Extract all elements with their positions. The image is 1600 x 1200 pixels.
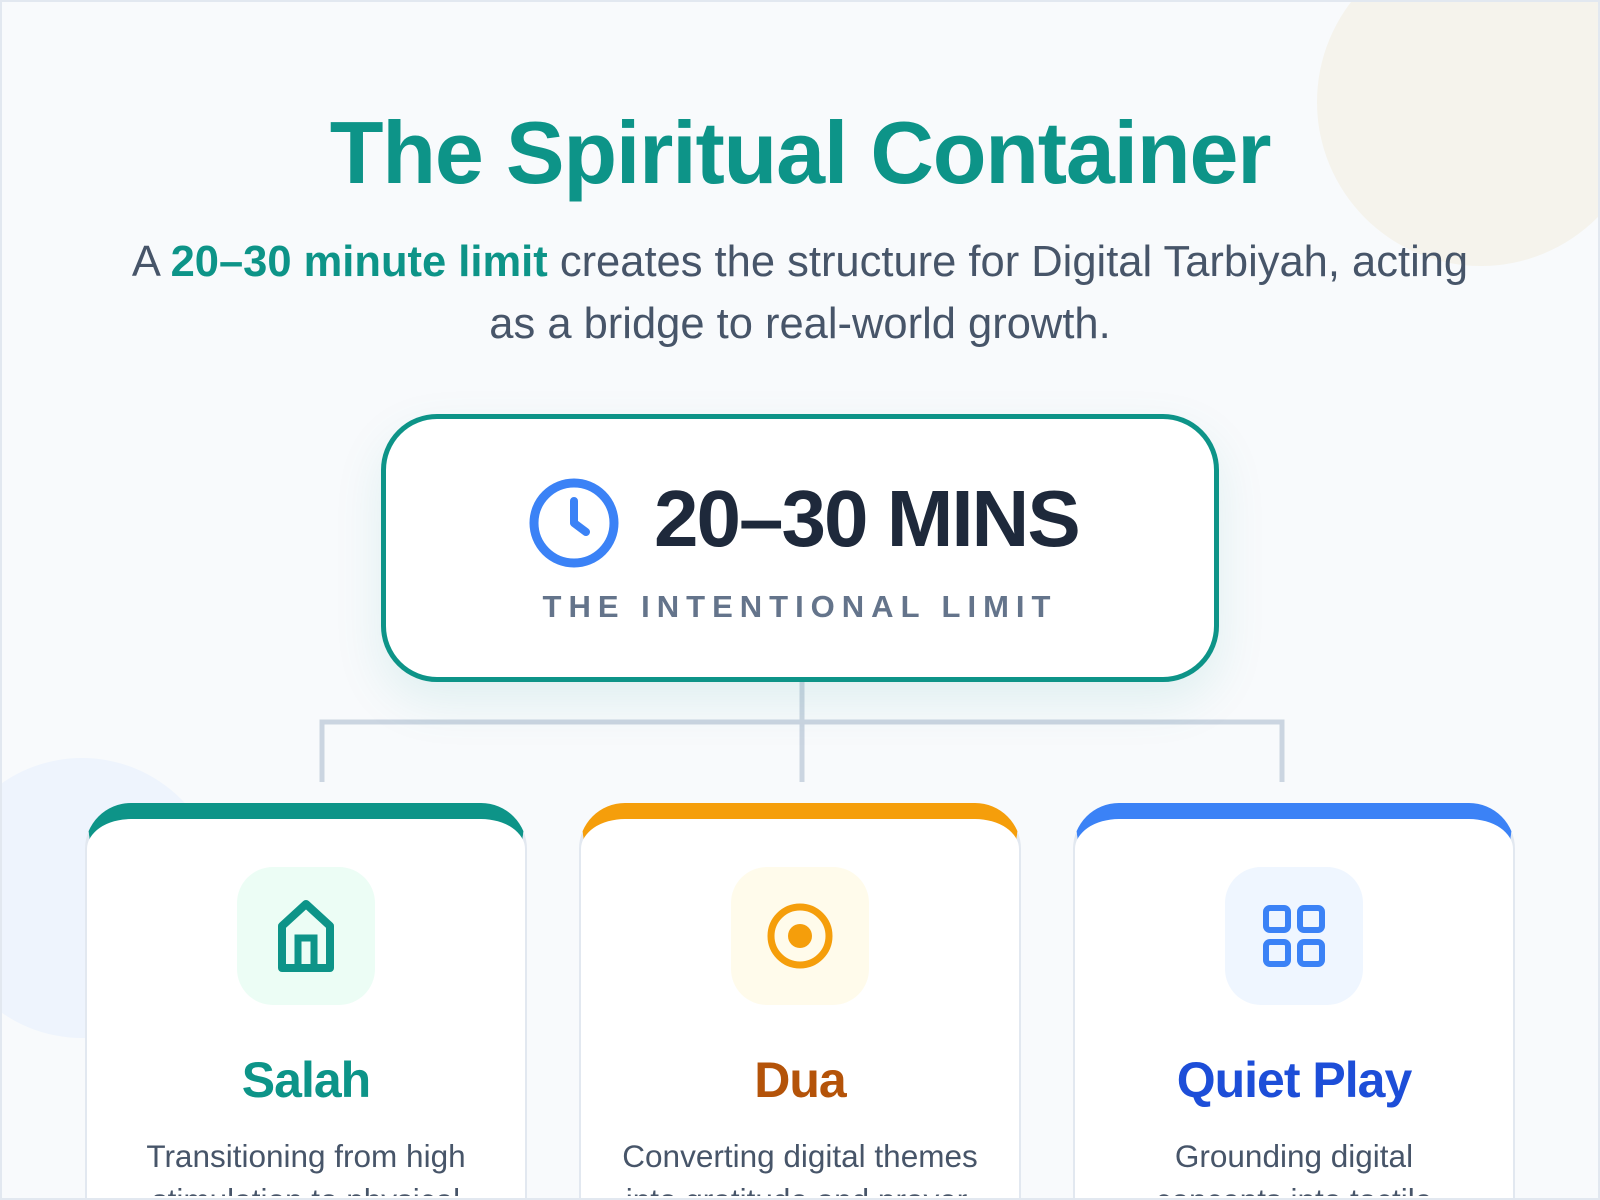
icon: grid [1225,867,1363,1005]
label: THE INTENTIONAL LIMIT [543,589,1057,624]
icon: clock [530,478,618,568]
main limit box [381,414,1219,682]
icon: house [237,867,375,1005]
icon: target [731,867,869,1005]
big number: 20–30 MINS [654,474,1079,563]
subtitle: A 20–30 minute limit creates the structure for Digital Tarbiyah, acting as a bridge to real-world growth. [132,238,1468,348]
decor circle bottom left [0,758,222,1038]
title: The Spiritual Container [330,103,1270,202]
card: Quiet Play [1073,803,1515,1198]
title: Salah [242,1052,370,1108]
card: Salah [85,803,527,1198]
decor circle top right [1317,0,1600,266]
card: Dua [579,803,1021,1198]
connector lines [320,682,1284,782]
title: Quiet Play [1177,1052,1411,1108]
title: Dua [754,1052,846,1108]
